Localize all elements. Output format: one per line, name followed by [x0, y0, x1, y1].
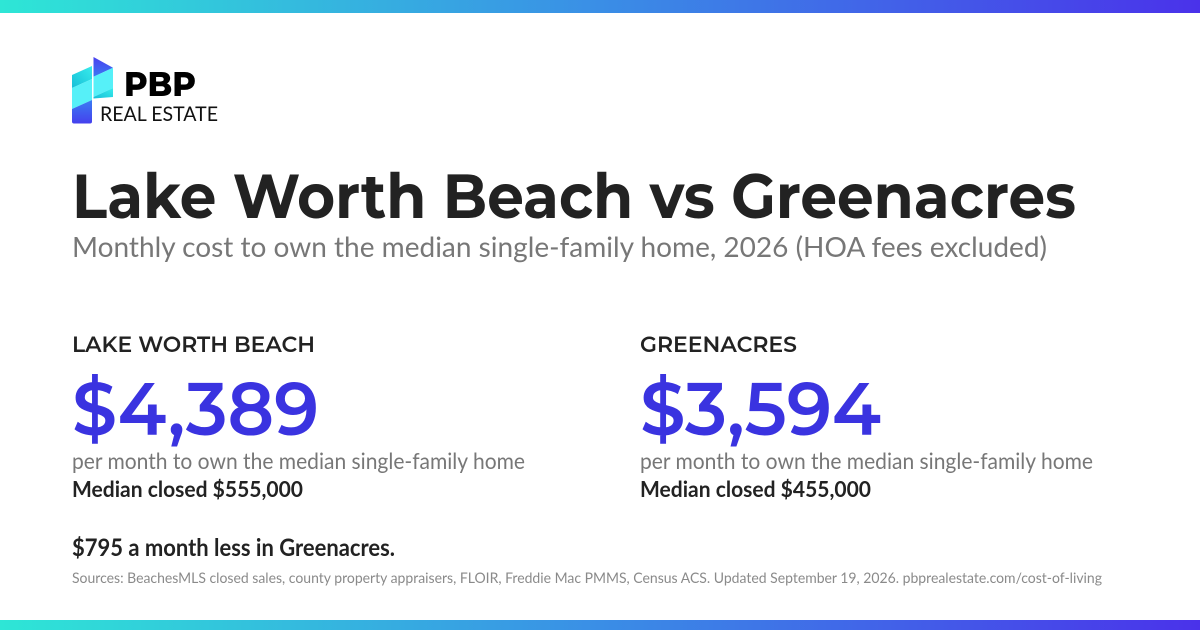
panel: Greenacres	[640, 331, 1093, 502]
bottom gradient bar	[0, 620, 1200, 630]
cost description: per month to own the median single-family home	[72, 447, 525, 474]
monthly cost figure: $4,389	[72, 363, 319, 454]
city label: GREENACRES	[640, 331, 797, 358]
title: Lake Worth Beach vs Greenacres	[72, 158, 1076, 234]
logo: PBP Real Estate	[72, 57, 218, 126]
logo wordmark: PBP	[124, 63, 196, 105]
city label: LAKE WORTH BEACH	[72, 331, 315, 358]
subtitle: Monthly cost to own the median single-family home, 2026 (HOA fees excluded)	[72, 229, 1047, 263]
icon: building mark	[72, 57, 113, 124]
median closed price: Median closed $555,000	[72, 475, 303, 502]
panel: Lake Worth Beach	[72, 331, 525, 502]
top gradient bar	[0, 0, 1200, 13]
monthly cost figure: $3,594	[640, 363, 881, 454]
logo tagline: REAL ESTATE	[100, 102, 218, 126]
callout: difference: $795 a month less in Greenacres.	[72, 533, 395, 562]
median closed price: Median closed $455,000	[640, 475, 871, 502]
sources note: Sources: BeachesMLS closed sales, county property appraisers, FLOIR, Freddie Mac PMMS, Census ACS. Updated September 19, 2026. pbprealestate.com/cost-of-living	[72, 569, 1102, 586]
cost description: per month to own the median single-family home	[640, 447, 1093, 474]
